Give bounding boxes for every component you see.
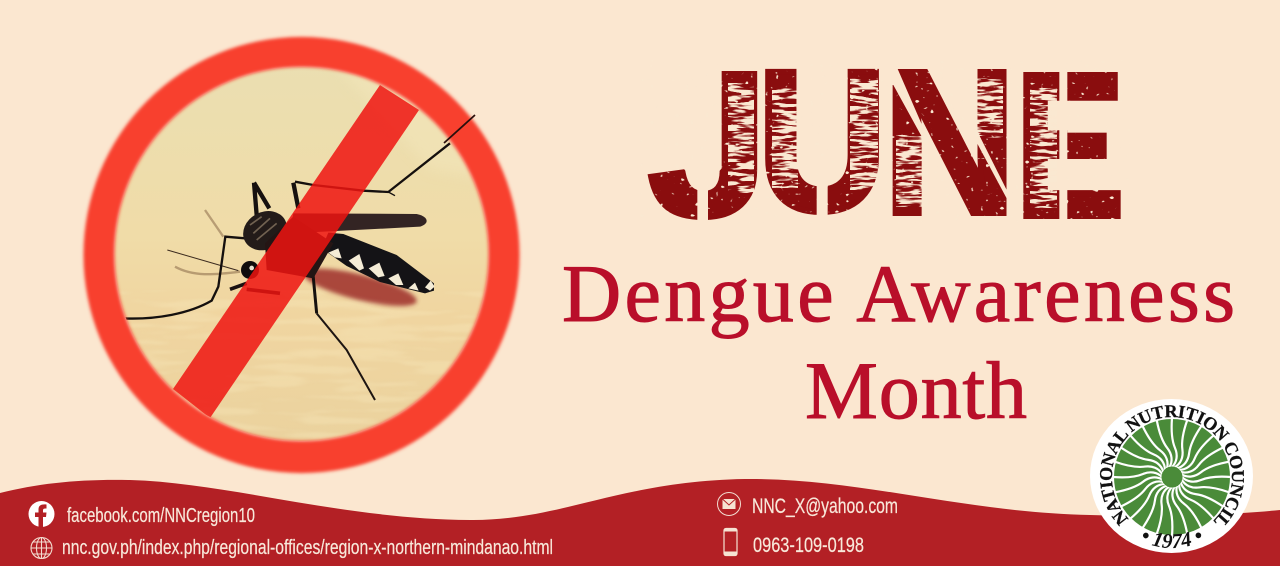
no-mosquito prohibition sign [83, 37, 519, 473]
JUNE letters: U [757, 29, 887, 253]
phone number: 0963-109-0198 [753, 534, 864, 557]
blood shadow [304, 265, 420, 310]
JUNE letters: E [1008, 31, 1126, 260]
faded far legs [175, 210, 240, 274]
head [241, 261, 259, 279]
icon: facebook [28, 501, 54, 527]
abdomen [322, 233, 434, 293]
underside [265, 217, 333, 278]
line 1: Dengue Awareness [562, 248, 1235, 339]
distressed texture [640, 60, 1130, 225]
footer wave band [0, 479, 1280, 566]
contact: email [718, 492, 898, 518]
stencil gaps [673, 63, 1137, 223]
rear leg [295, 143, 450, 192]
icon: envelope [718, 492, 740, 516]
JUNE letters: J [648, 30, 769, 259]
JUNE title [640, 28, 1137, 260]
seal ring text: NATIONAL NUTRITION COUNCIL [1100, 405, 1244, 526]
antenna [167, 250, 238, 271]
short raised legs [254, 183, 298, 215]
line 2: Month [805, 345, 1027, 436]
diagonal slash [173, 85, 419, 418]
lower leg [312, 260, 317, 313]
red ring [83, 37, 519, 473]
front leg [122, 237, 245, 319]
green sunburst [1113, 418, 1231, 536]
email address: NNC_X@yahoo.com [752, 495, 898, 518]
seal year: • 1974 • [1143, 532, 1202, 548]
mosquito [122, 143, 450, 400]
heading: Dengue Awareness Month [562, 248, 1235, 436]
website address: nnc.gov.ph/index.php/regional-offices/region-x-northern-mindanao.html [62, 537, 553, 559]
abdomen white bands [328, 248, 435, 291]
icon: phone [724, 528, 737, 556]
wing [290, 213, 427, 233]
facebook address: facebook.com/NNCregion10 [67, 505, 255, 527]
seal white disc [1090, 399, 1253, 553]
JUNE letters [648, 28, 1126, 260]
rear leg tip crossing ring [444, 115, 475, 143]
contact: website [31, 537, 553, 559]
mosquito photo circle [114, 67, 488, 441]
contact: facebook [28, 501, 255, 527]
mouth parts [230, 283, 280, 293]
JUNE letters: N [883, 28, 1016, 257]
icon: globe [31, 538, 52, 558]
thorax [243, 211, 286, 250]
logo: National Nutrition Council seal [1090, 399, 1253, 553]
contact: phone [724, 528, 864, 557]
